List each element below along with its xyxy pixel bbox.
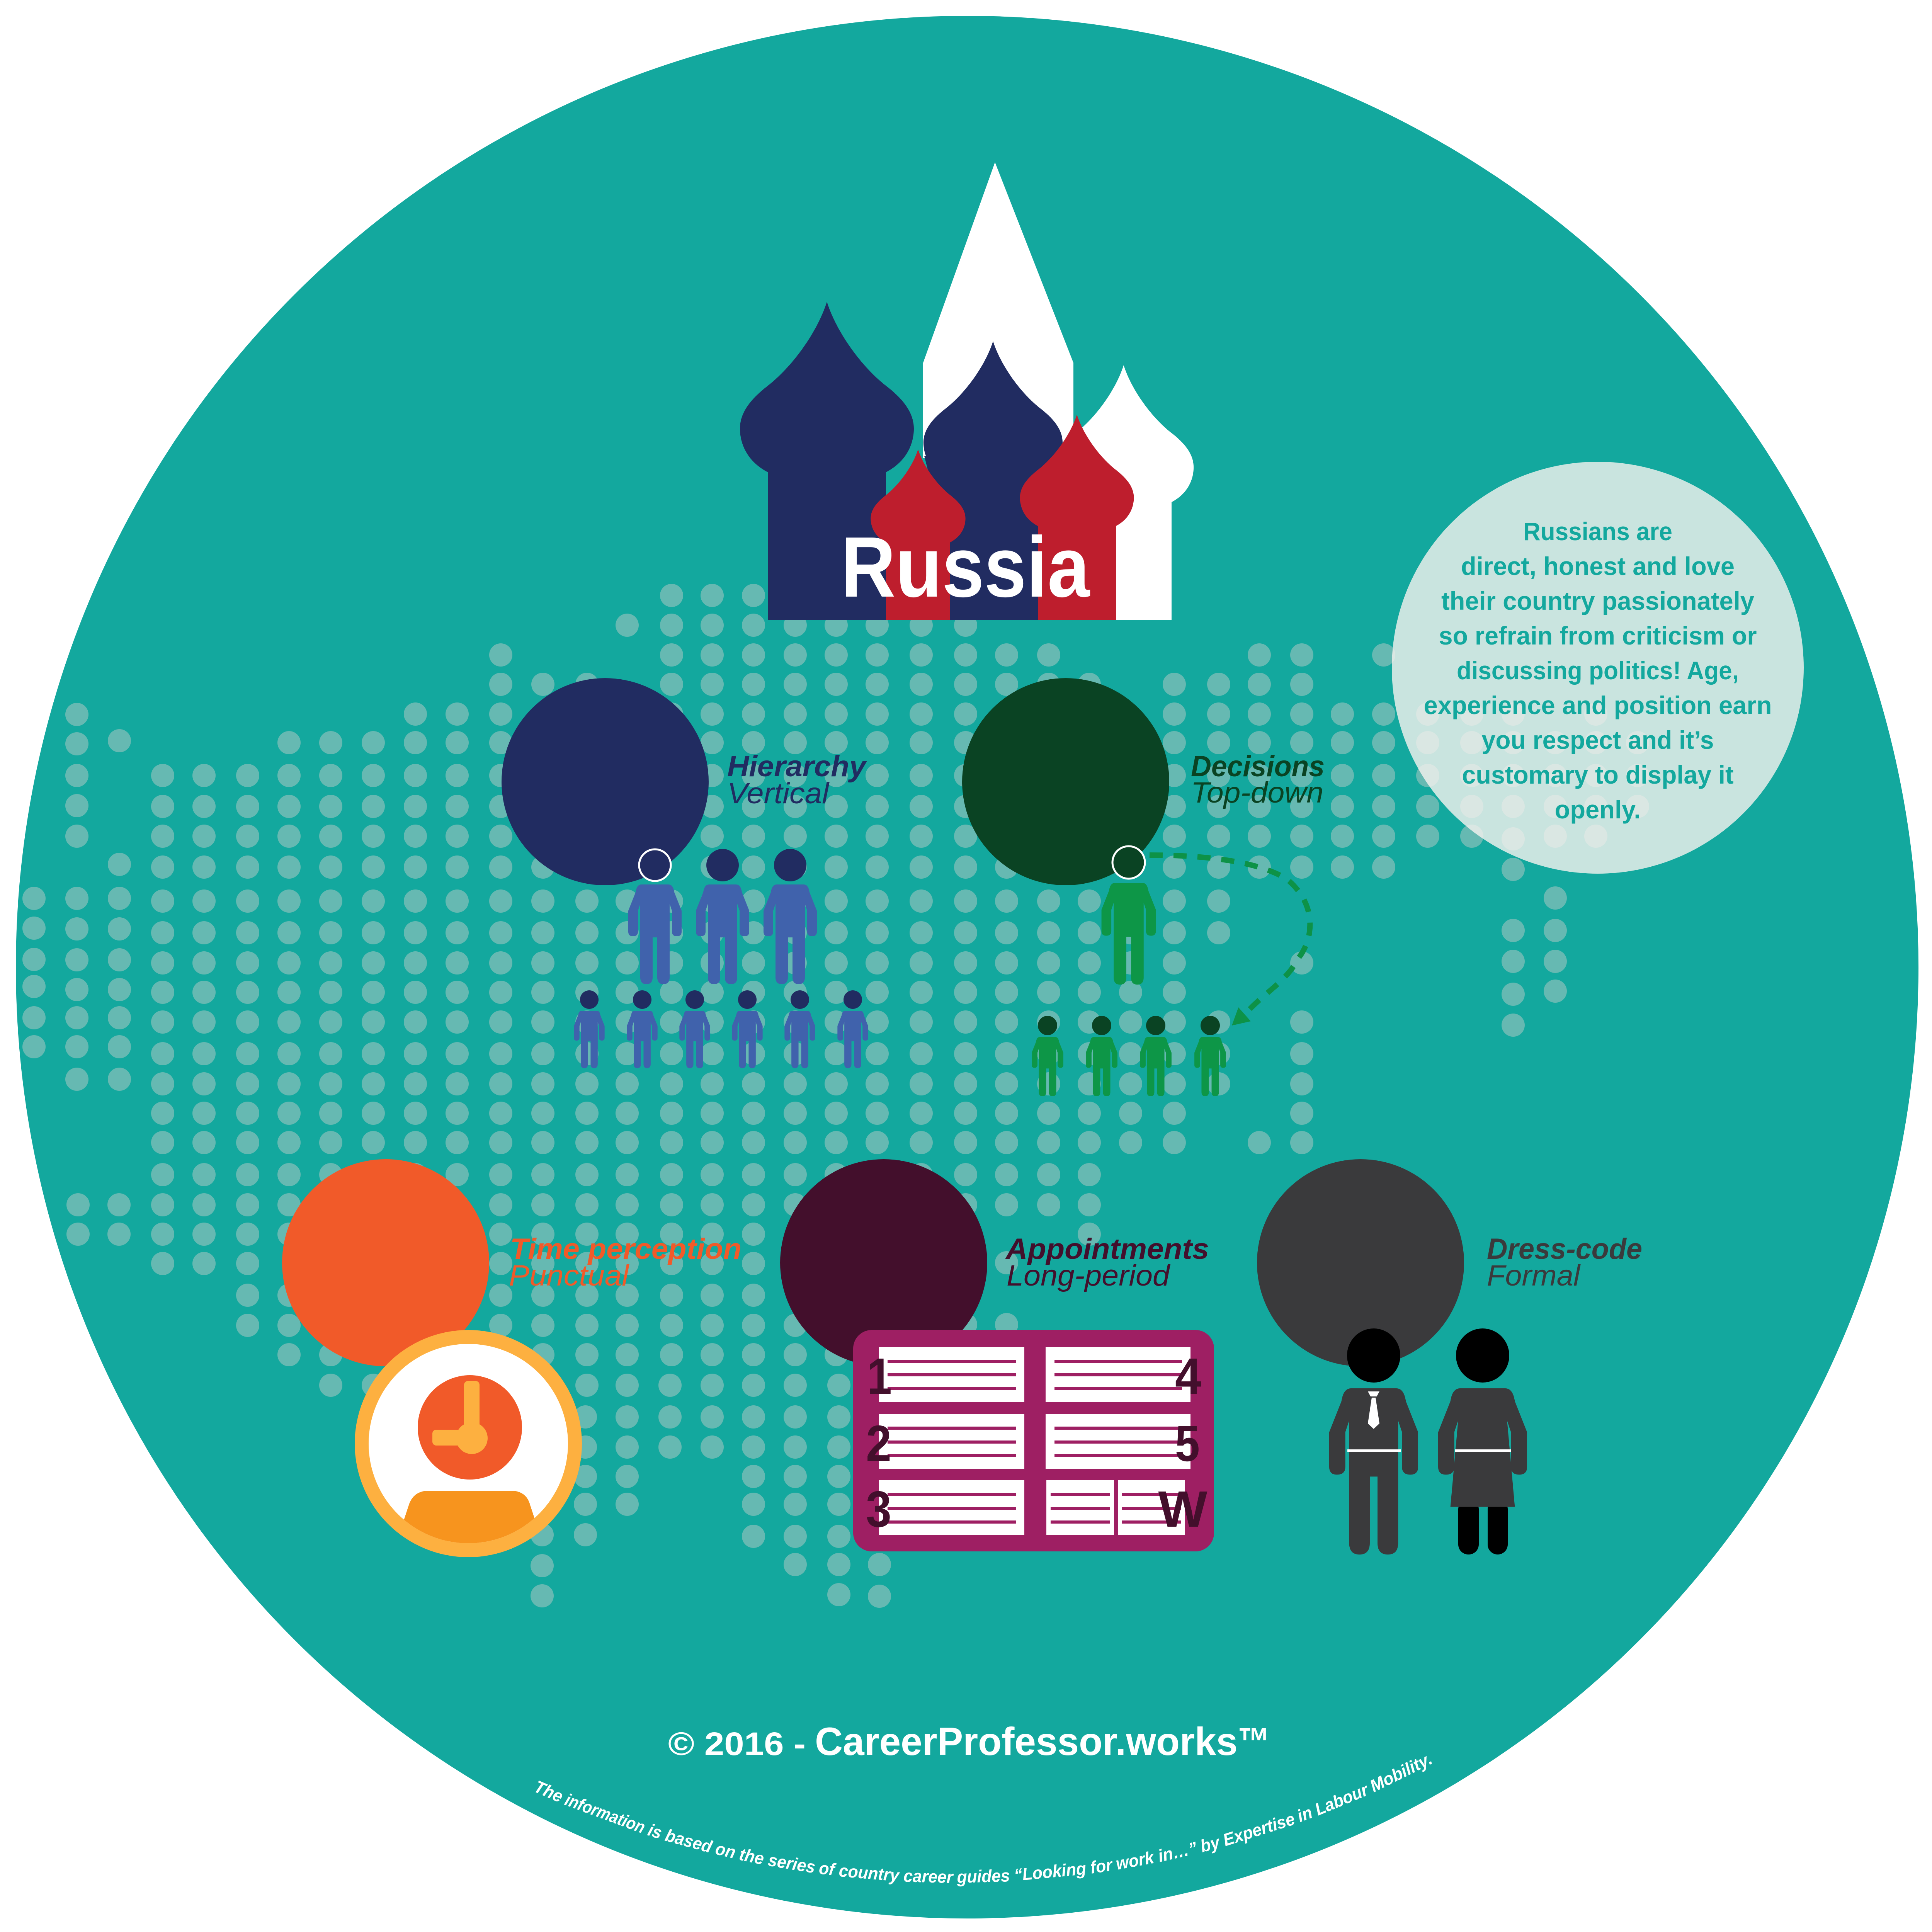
hierarchy label: Hierarchy xyxy=(727,750,867,783)
calendar day numbers: 4 xyxy=(1175,1348,1201,1405)
icon: leader figure xyxy=(1102,846,1156,985)
decisions label: Decisions xyxy=(1191,750,1325,783)
arrow: dashed decision flow xyxy=(1150,855,1310,1026)
time perception label: Time perception xyxy=(510,1233,742,1265)
bubble text: their country passionately xyxy=(1441,587,1754,615)
time perception label: Punctual xyxy=(509,1259,629,1292)
decisions label xyxy=(1191,750,1325,809)
title: Russia xyxy=(841,519,1090,615)
curved source note: on xyxy=(714,1838,738,1862)
calendar day numbers: 2 xyxy=(866,1415,891,1472)
copyright line: CareerProfessor.works xyxy=(815,1719,1238,1764)
curved source note xyxy=(531,1749,1435,1887)
curved source note: Labour xyxy=(1312,1779,1372,1819)
curved source note: in xyxy=(1294,1802,1315,1826)
icon: woman in skirt xyxy=(1438,1328,1527,1554)
icon: six small figures xyxy=(574,990,868,1068)
bubble text: openly. xyxy=(1555,795,1641,824)
icon: three large figures xyxy=(628,849,817,984)
dress code label: Formal xyxy=(1487,1259,1581,1292)
curved source note: “Looking xyxy=(1013,1859,1087,1885)
bubble text: Russians are xyxy=(1523,517,1672,546)
curved source note: work xyxy=(1114,1847,1156,1874)
curved source note: the xyxy=(738,1844,766,1869)
panel: dress code xyxy=(1257,1159,1642,1554)
calendar day numbers: 5 xyxy=(1175,1415,1200,1472)
calendar day numbers: W xyxy=(1158,1481,1208,1537)
curved source note: in…” xyxy=(1156,1838,1199,1866)
calendar day numbers xyxy=(866,1348,1208,1537)
curved source note: The xyxy=(531,1776,566,1806)
curved source note: is xyxy=(646,1820,665,1843)
dot map of Russia xyxy=(34,595,1638,1596)
bubble text xyxy=(1423,517,1772,824)
curved source note: Mobility. xyxy=(1367,1749,1435,1796)
bubble text: experience and position earn xyxy=(1423,691,1772,719)
appointments label: Appointments xyxy=(1005,1233,1209,1265)
curved source note: information xyxy=(563,1790,648,1837)
curved source note: guides xyxy=(956,1866,1010,1887)
icon: clock person xyxy=(355,1330,582,1557)
panel: time perception xyxy=(282,1159,742,1557)
icon: weekly calendar xyxy=(853,1330,1214,1551)
panel: decisions xyxy=(962,678,1325,1096)
curved source note: based xyxy=(663,1825,715,1857)
icon: four small figures xyxy=(1032,1016,1226,1096)
appointments label xyxy=(1005,1233,1209,1292)
bubble text: so refrain from criticism or xyxy=(1439,621,1757,650)
bubble text: direct, honest and love xyxy=(1461,552,1735,580)
decisions label: Top-down xyxy=(1191,776,1323,809)
panel: appointments xyxy=(780,1159,1214,1551)
time perception label xyxy=(509,1233,742,1292)
copyright line: © 2016 - xyxy=(668,1726,806,1762)
curved source note: Expertise xyxy=(1221,1809,1297,1850)
icon: man in suit xyxy=(1329,1328,1418,1554)
dress code label: Dress-code xyxy=(1487,1233,1642,1265)
dress code label xyxy=(1487,1233,1642,1292)
copyright line: ™ xyxy=(1238,1719,1270,1764)
bubble text: you respect and it’s xyxy=(1481,726,1714,754)
panel: intro bubble xyxy=(1392,462,1804,874)
panel: hierarchy xyxy=(502,678,868,1068)
icon: cathedral domes xyxy=(740,162,1194,620)
bubble text: discussing politics! Age, xyxy=(1457,656,1739,685)
hierarchy label: Vertical xyxy=(727,777,830,810)
hierarchy label xyxy=(727,750,867,810)
curved source note: for xyxy=(1089,1855,1114,1878)
curved source note: by xyxy=(1198,1832,1223,1856)
calendar day numbers: 1 xyxy=(867,1348,892,1405)
curved source note: of xyxy=(818,1858,837,1879)
bubble text: customary to display it xyxy=(1462,760,1734,789)
curved source note: series xyxy=(767,1850,817,1877)
curved source note: country xyxy=(838,1861,901,1885)
calendar day numbers: 3 xyxy=(866,1481,891,1537)
appointments label: Long-period xyxy=(1007,1259,1171,1292)
curved source note: career xyxy=(903,1866,954,1887)
